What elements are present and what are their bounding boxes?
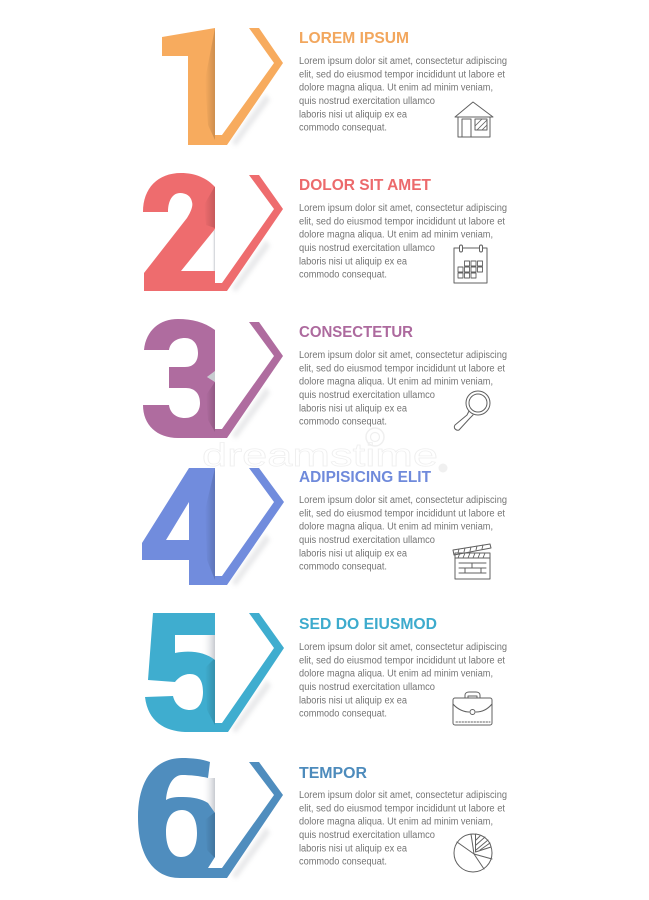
body text: Lorem ipsum dolor sit amet, consectetur adipiscing	[299, 203, 507, 214]
body text: dolore magna aliqua. Ut enim ad minim veniam,	[299, 669, 493, 680]
body text: Lorem ipsum dolor sit amet, consectetur adipiscing	[299, 350, 507, 361]
numeral 3 with chevron fold	[143, 319, 283, 439]
icon: briefcase	[453, 692, 492, 725]
body text: Lorem ipsum dolor sit amet, consectetur adipiscing	[299, 56, 507, 67]
body text: elit, sed do eiusmod tempor incididunt ut labore et	[299, 655, 505, 666]
body text	[299, 790, 507, 868]
step 3	[143, 319, 507, 439]
body text: dolore magna aliqua. Ut enim ad minim veniam,	[299, 522, 493, 533]
numeral 4 with chevron fold	[142, 468, 284, 586]
body text	[299, 56, 507, 134]
body text: commodo consequat.	[299, 123, 387, 134]
body text: laboris nisi ut aliquip ex ea	[299, 256, 407, 267]
body text: elit, sed do eiusmod tempor incididunt ut labore et	[299, 363, 505, 374]
body text	[299, 495, 507, 573]
body text: dolore magna aliqua. Ut enim ad minim veniam,	[299, 83, 493, 94]
body text: laboris nisi ut aliquip ex ea	[299, 548, 407, 559]
heading: TEMPOR	[299, 765, 367, 782]
step 4	[142, 468, 507, 586]
icon: house	[455, 102, 493, 137]
body text: Lorem ipsum dolor sit amet, consectetur adipiscing	[299, 642, 507, 653]
body text: elit, sed do eiusmod tempor incididunt ut labore et	[299, 216, 505, 227]
step 5	[145, 613, 507, 733]
body text	[299, 642, 507, 720]
body text: quis nostrud exercitation ullamco	[299, 535, 435, 546]
heading: DOLOR SIT AMET	[299, 177, 432, 194]
body text: dolore magna aliqua. Ut enim ad minim veniam,	[299, 230, 493, 241]
body text: laboris nisi ut aliquip ex ea	[299, 695, 407, 706]
body text: quis nostrud exercitation ullamco	[299, 830, 435, 841]
body text	[299, 350, 507, 428]
body text: elit, sed do eiusmod tempor incididunt ut labore et	[299, 803, 505, 814]
body text	[299, 203, 507, 281]
numeral 6 with chevron fold	[138, 758, 283, 879]
heading: SED DO EIUSMOD	[299, 616, 437, 633]
body text: commodo consequat.	[299, 857, 387, 868]
step 1	[162, 28, 507, 146]
body text: quis nostrud exercitation ullamco	[299, 682, 435, 693]
body text: dolore magna aliqua. Ut enim ad minim veniam,	[299, 817, 493, 828]
heading: ADIPISICING ELIT	[299, 469, 432, 486]
body text: commodo consequat.	[299, 270, 387, 281]
icon: pie chart	[454, 834, 492, 872]
step 6	[138, 758, 507, 879]
step 2	[143, 173, 507, 292]
icon: clapperboard	[453, 544, 491, 579]
body text: laboris nisi ut aliquip ex ea	[299, 109, 407, 120]
body text: dolore magna aliqua. Ut enim ad minim veniam,	[299, 377, 493, 388]
numeral 2 with chevron fold	[143, 173, 283, 292]
body text: commodo consequat.	[299, 417, 387, 428]
body text: quis nostrud exercitation ullamco	[299, 243, 435, 254]
numeral 5 with chevron fold	[145, 613, 284, 733]
icon: calendar	[454, 245, 487, 283]
body text: laboris nisi ut aliquip ex ea	[299, 403, 407, 414]
body text: quis nostrud exercitation ullamco	[299, 96, 435, 107]
body text: elit, sed do eiusmod tempor incididunt ut labore et	[299, 508, 505, 519]
body text: elit, sed do eiusmod tempor incididunt ut labore et	[299, 69, 505, 80]
body text: Lorem ipsum dolor sit amet, consectetur adipiscing	[299, 790, 507, 801]
body text: Lorem ipsum dolor sit amet, consectetur adipiscing	[299, 495, 507, 506]
body text: laboris nisi ut aliquip ex ea	[299, 843, 407, 854]
body text: commodo consequat.	[299, 562, 387, 573]
heading: LOREM IPSUM	[299, 30, 409, 47]
watermark	[202, 428, 448, 473]
icon: magnifier	[454, 391, 490, 430]
numeral 1 with chevron fold	[162, 28, 283, 146]
body text: commodo consequat.	[299, 709, 387, 720]
watermark: dreamstime	[202, 437, 438, 473]
heading: CONSECTETUR	[299, 324, 413, 341]
body text: quis nostrud exercitation ullamco	[299, 390, 435, 401]
